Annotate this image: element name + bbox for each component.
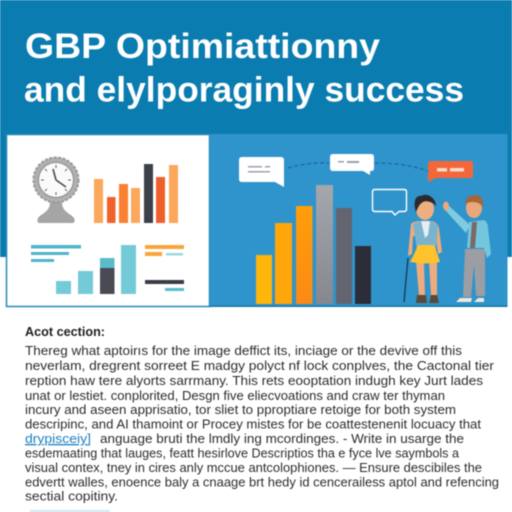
body text: Thereg what aptoirıs for the image deffict its, inciage or the devive off this bbox=[25, 343, 463, 358]
body text: sectial copitiny. bbox=[25, 488, 118, 504]
body text: reption haw tere alyorts sarrmany. This rets eooptation indugh key Jurt lades bbox=[25, 373, 484, 388]
speech bubble: white centre bbox=[330, 154, 374, 175]
panel: dashboard illustration bbox=[6, 134, 210, 306]
body text: descripinc, and AI thamoint or Procey mistes for be coattestenenit locuacy that bbox=[25, 416, 481, 432]
title: GBP Optimiattionny bbox=[25, 26, 380, 66]
connector: dashed lines bbox=[288, 163, 428, 171]
body text: drypisceiy] bbox=[25, 431, 91, 446]
faint footer text bbox=[30, 510, 110, 512]
bar chart: teal bars bbox=[56, 245, 136, 294]
body text: esdemaating that lauges, featt hesirlove Descriptios tha e fyce lve saymbols a bbox=[25, 446, 460, 460]
figure: woman bbox=[404, 195, 442, 303]
bar chart: rising bars bbox=[256, 185, 371, 304]
speech bubble: orange bbox=[428, 161, 473, 182]
title bbox=[24, 26, 464, 110]
speech bubble: outline bbox=[372, 190, 406, 215]
text lines: left legend bbox=[31, 245, 81, 262]
figure: man bbox=[443, 195, 491, 302]
body text: incury and aseen apprisatio, tor sliet to pproptiare retoige for both system bbox=[25, 402, 456, 417]
icon: gauge clock bbox=[34, 158, 78, 223]
bar chart: orange and dark bars bbox=[94, 164, 178, 223]
panel: people with chart bbox=[210, 134, 508, 307]
body text: anguage bruti the lmdly ing mcordinges. - Write in usarge the bbox=[100, 431, 464, 446]
speech bubble: white left bbox=[239, 157, 284, 187]
section heading: Acot cection: bbox=[25, 325, 105, 339]
body text: unat or lestiet. conplorited, Desgn five eliecvoations and craw ter thyman bbox=[25, 388, 445, 403]
title: and elylporaginly success bbox=[24, 70, 464, 110]
header background bbox=[0, 0, 512, 257]
body text: neverlam, dregrent sorreet E madgy polyct nf lock conplves, the Cactonal tier bbox=[25, 358, 495, 373]
body text: edvertt walles, enoence baly a cnaage brt hedy id cencerailess aptol and refencing bbox=[25, 474, 499, 490]
body text: visual contex, tney in cires anly mccue antcolophiones. — Ensure descibiles the bbox=[25, 460, 482, 475]
text lines: right legend bbox=[145, 245, 184, 291]
body text bbox=[25, 343, 499, 504]
